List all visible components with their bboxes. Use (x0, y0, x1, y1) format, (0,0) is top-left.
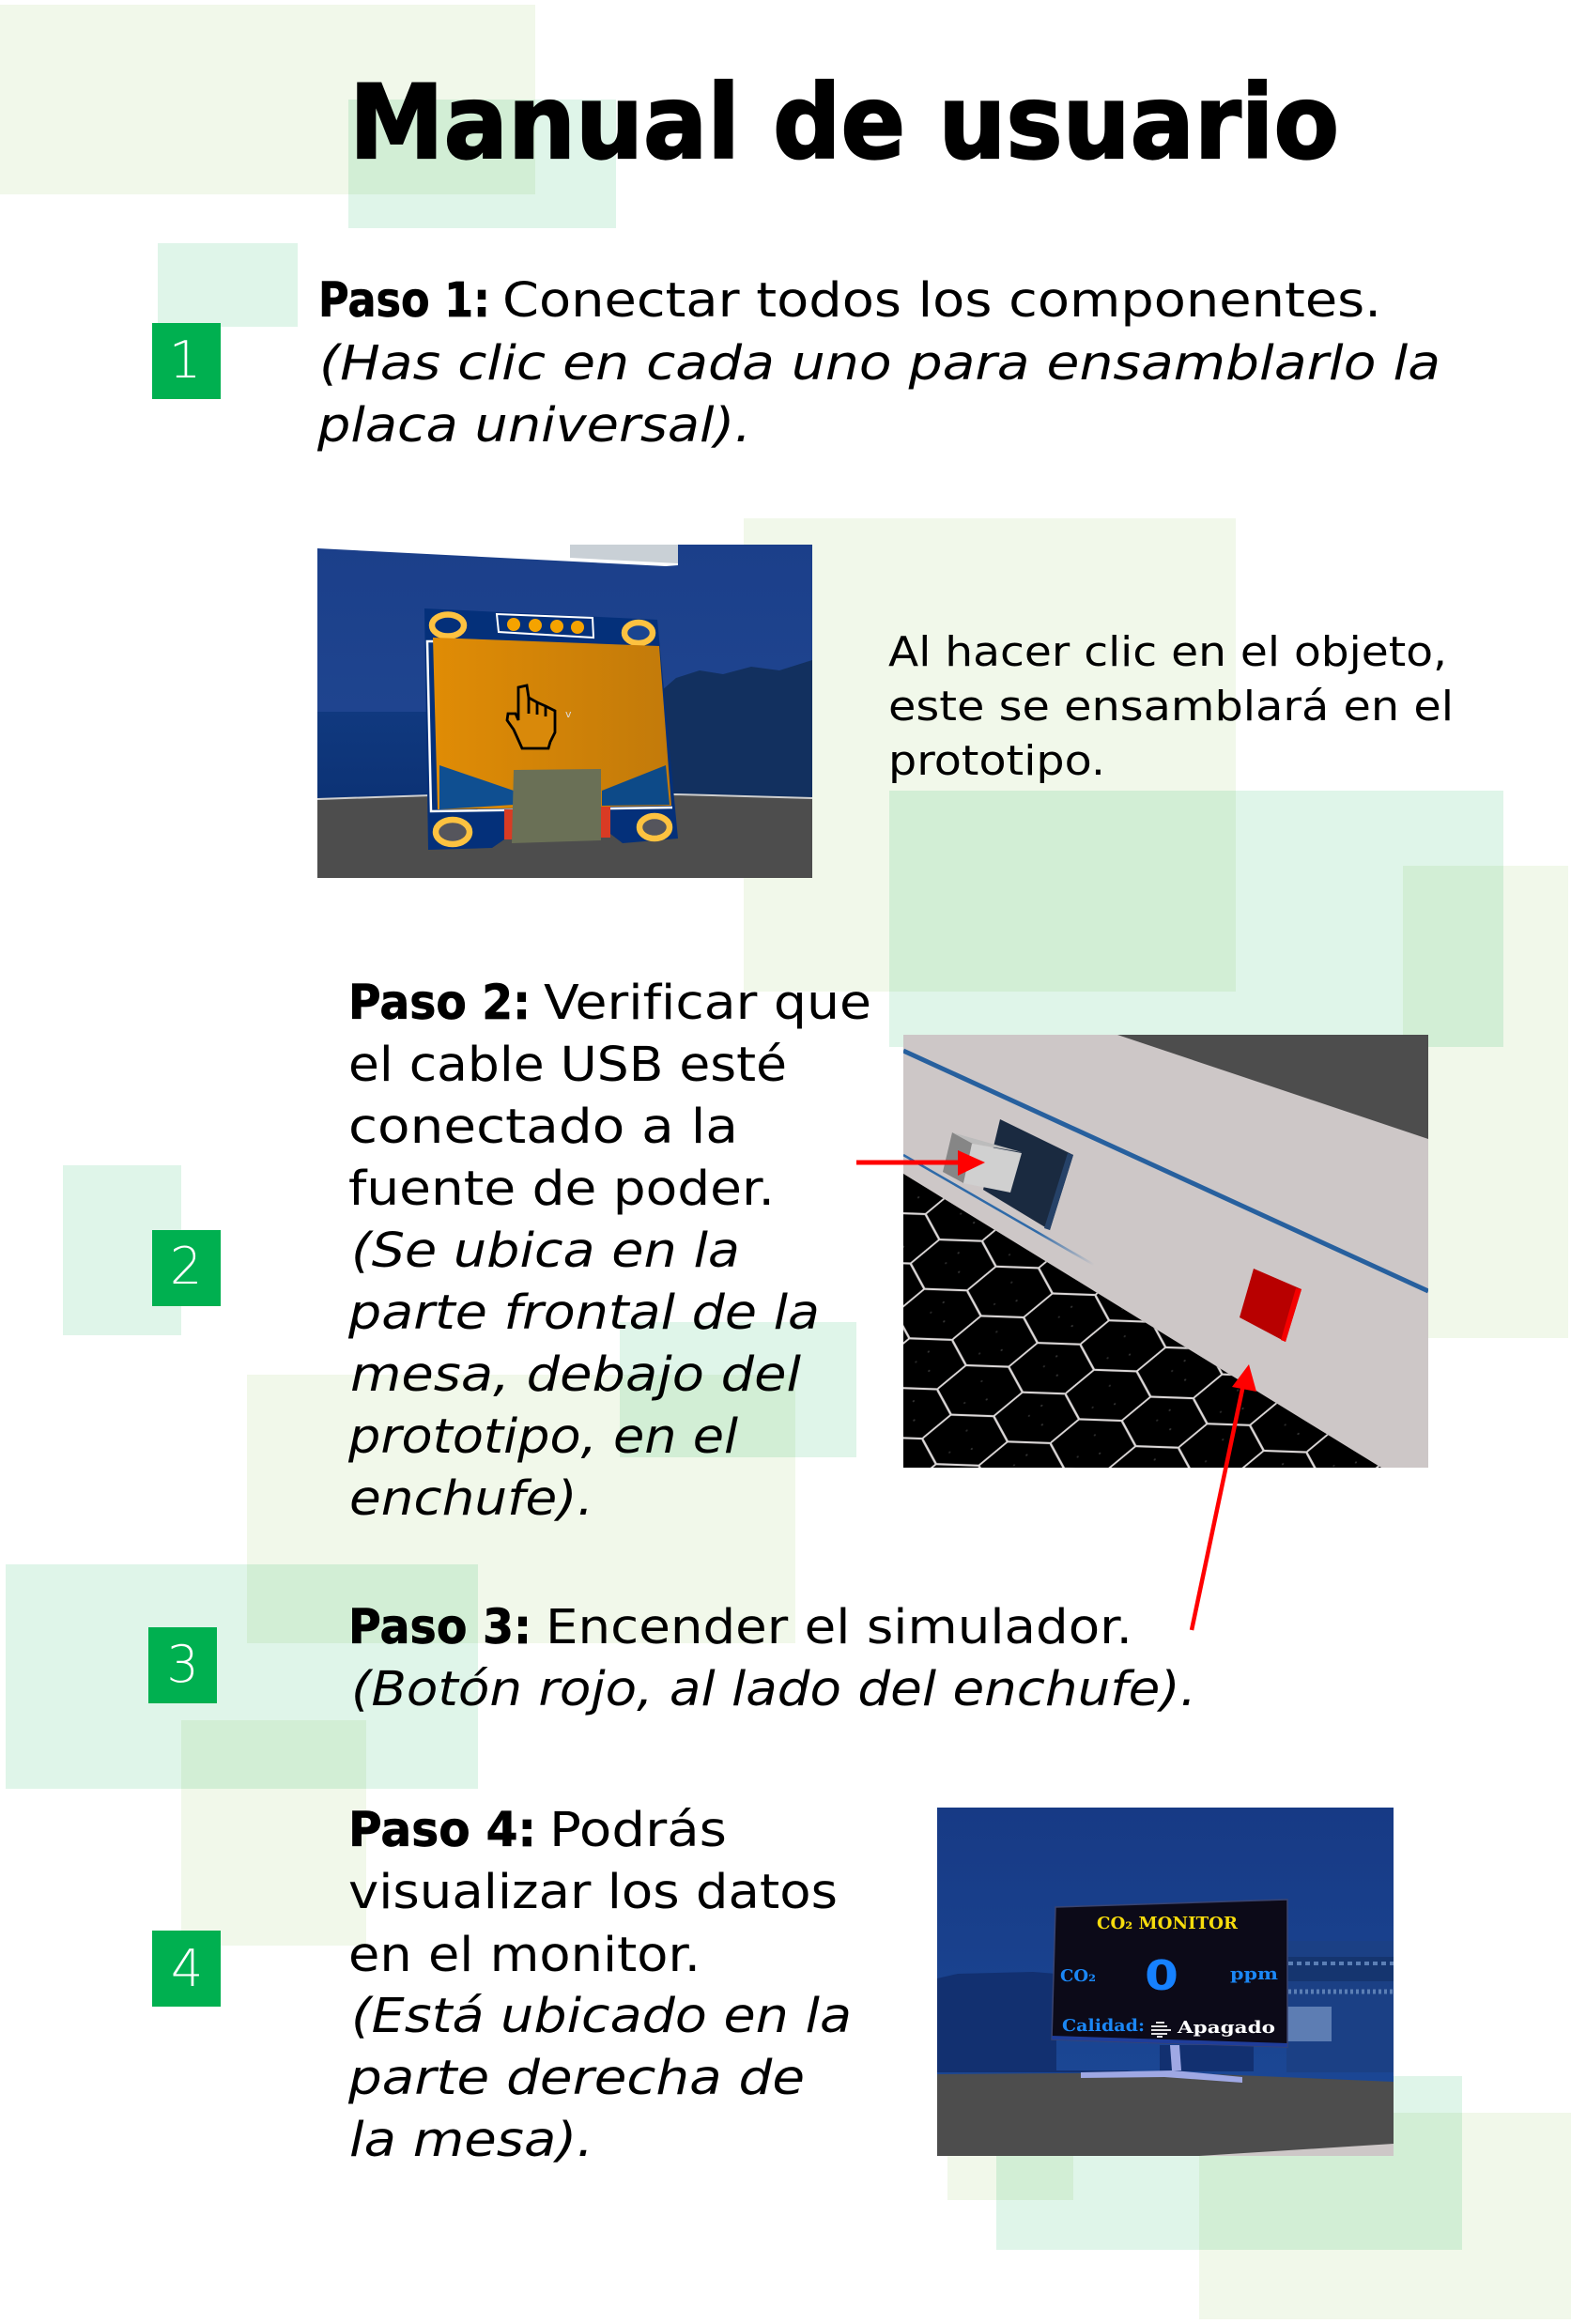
hexagon floor (903, 1174, 1381, 1468)
step 3 number badge: 3 (166, 1635, 199, 1694)
step 3 instruction text: Paso 3: (348, 1600, 531, 1655)
side note about assembling: Al hacer clic en el objeto, (888, 628, 1447, 676)
trees (937, 1972, 1141, 2072)
image: CO2 monitor on the table (937, 1808, 1394, 2156)
background building (1160, 1955, 1394, 2072)
step 2 instruction text: Verificar que (544, 976, 871, 1031)
step 1 number badge: 1 (169, 331, 201, 390)
step 1 number badge (152, 323, 221, 399)
monitor title: CO₂ MONITOR (1097, 1914, 1239, 1933)
step 4 instruction text: parte derecha de (347, 2051, 805, 2106)
wall outlet (983, 1119, 1073, 1230)
step 3 instruction text: Encender el simulador. (546, 1600, 1132, 1655)
step 1 instruction text: Paso 1: (318, 273, 490, 329)
step 2 instruction text: fuente de poder. (348, 1162, 775, 1217)
image: table edge with USB outlet and red power button (903, 1035, 1428, 1468)
step 4 instruction text: visualizar los datos (348, 1865, 838, 1920)
step 2 number badge: 2 (170, 1237, 202, 1296)
mounting pads (432, 614, 670, 844)
CO2 value: 0 (1145, 1952, 1178, 2000)
step 2 instruction text: Paso 2: (348, 976, 531, 1031)
step 4 instruction text: (Está ubicado en la (351, 1989, 852, 2044)
step 1 instruction text: placa universal). (316, 398, 751, 454)
step 3 instruction text: (Botón rojo, al lado del enchufe). (351, 1662, 1196, 1717)
step 2 instruction text: enchufe). (349, 1471, 593, 1527)
icon: hand cursor (507, 685, 555, 748)
step 2 number badge (152, 1230, 221, 1306)
step 4 instruction text (347, 1803, 852, 2168)
CO2 label: CO₂ (1060, 1966, 1096, 1986)
circuit board (424, 608, 678, 850)
step 2 instruction text (347, 976, 871, 1527)
side note about assembling: este se ensamblará en el (888, 683, 1454, 731)
step 2 instruction text: el cable USB esté (348, 1038, 787, 1093)
orange screen (433, 638, 671, 809)
step 1 instruction text: Conectar todos los componentes. (502, 273, 1381, 329)
icon: wind (1151, 2023, 1171, 2037)
ppm label: ppm (1230, 1964, 1278, 1984)
arrow: to USB plug (856, 1150, 985, 1176)
step 1 instruction text: (Has clic en cada uno para ensamblarlo la (319, 336, 1440, 392)
step 4 number badge: 4 (171, 1939, 203, 1998)
table top (1117, 1035, 1428, 1139)
quality label: Calidad: (1062, 2016, 1145, 2036)
step 4 instruction text: Paso 4: (348, 1803, 536, 1858)
USB plug (943, 1132, 1022, 1193)
table surface (937, 2072, 1394, 2156)
red power button (1240, 1269, 1301, 1342)
monitor stand (1081, 2045, 1242, 2083)
step 2 instruction text: prototipo, en el (347, 1409, 738, 1465)
table surface (317, 794, 812, 878)
step 2 instruction text: conectado a la (348, 1100, 738, 1155)
step 2 instruction text: parte frontal de la (347, 1285, 820, 1341)
tree line (662, 660, 812, 798)
side note about assembling: prototipo. (888, 737, 1105, 785)
image: OLED display component with hand cursor: v (565, 708, 572, 720)
step 4 instruction text: la mesa). (349, 2113, 593, 2168)
step 2 instruction text: (Se ubica en la (351, 1224, 740, 1279)
image: OLED display component with hand cursor (317, 545, 812, 878)
step 4 instruction text: Podrás (549, 1803, 727, 1858)
title: Manual de usuario (349, 63, 1339, 182)
step 3 number badge (148, 1627, 217, 1703)
step 4 number badge (152, 1931, 221, 2007)
side note about assembling (888, 628, 1454, 785)
step 4 instruction text: en el monitor. (348, 1928, 701, 1983)
arrow: to red button (1192, 1364, 1256, 1630)
ribbon block (512, 769, 601, 843)
monitor (1052, 1900, 1287, 2047)
quality status: Apagado (1177, 2018, 1275, 2038)
step 1 instruction text (316, 273, 1440, 454)
pin header (497, 614, 593, 638)
step 3 instruction text (348, 1600, 1196, 1717)
step 2 instruction text: mesa, debajo del (350, 1347, 801, 1403)
